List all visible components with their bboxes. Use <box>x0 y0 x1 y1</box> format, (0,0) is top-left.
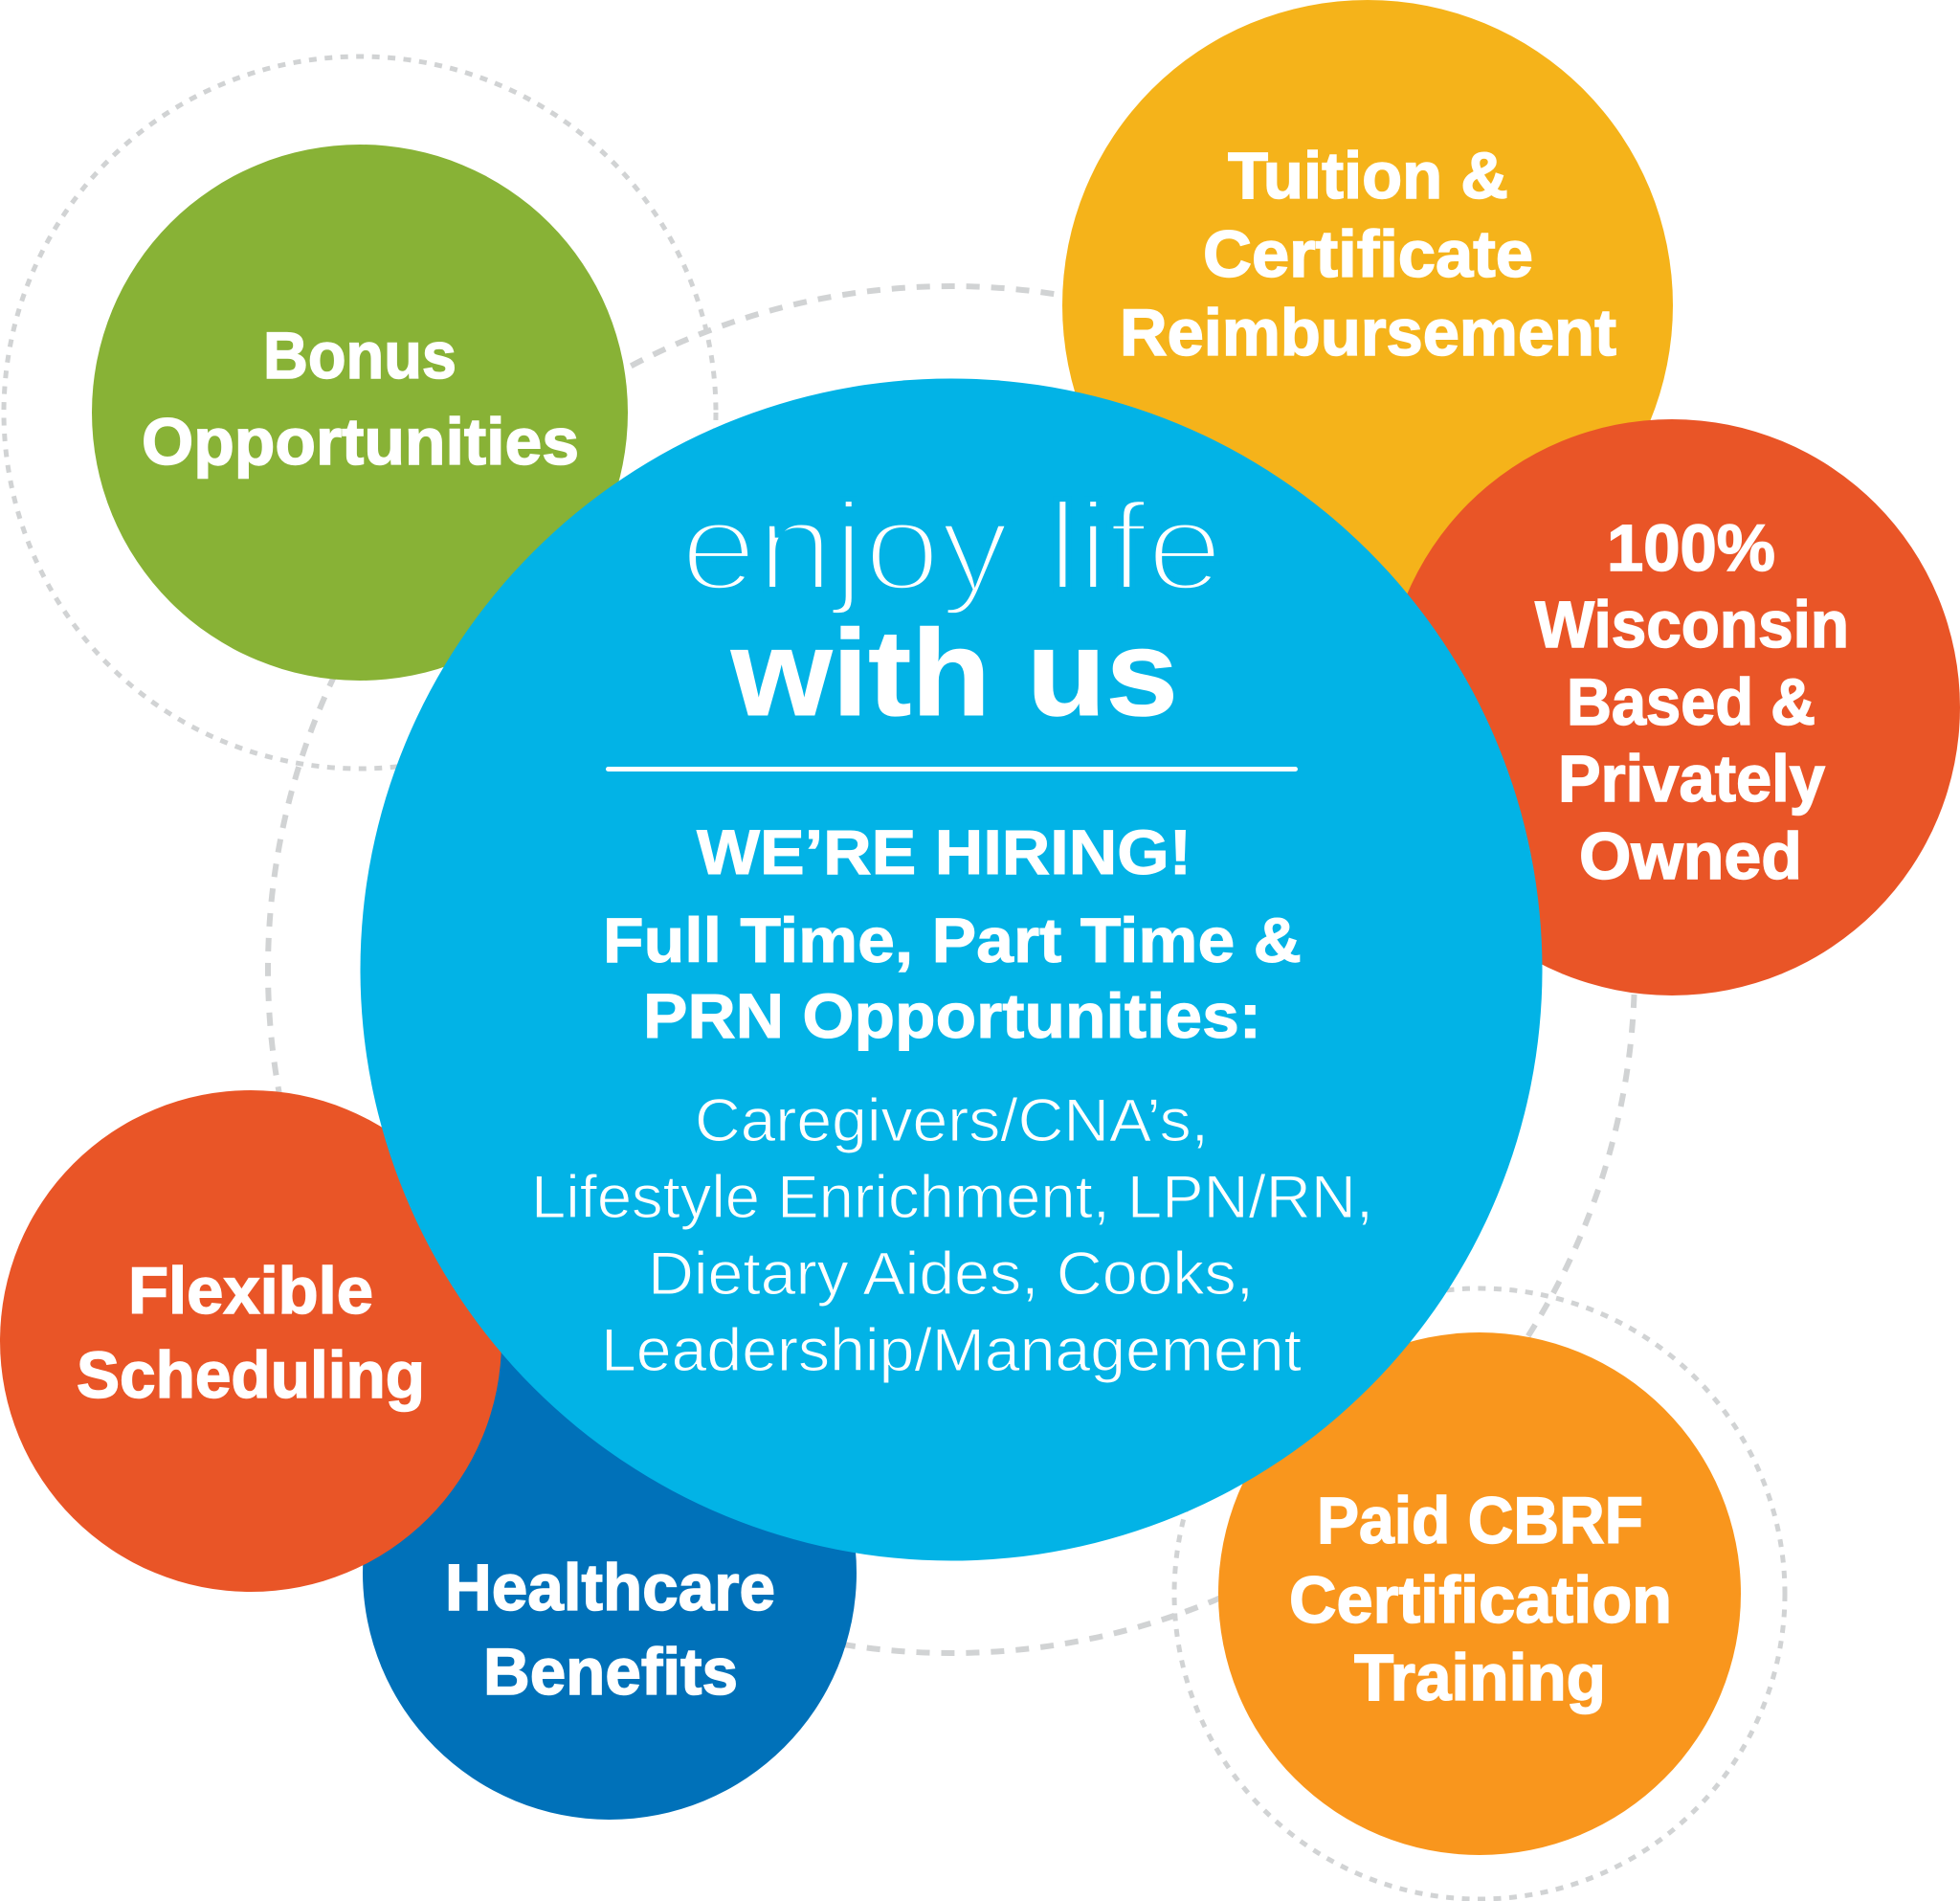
subheading: full time, part time and PRN: Full Time, Part Time & <box>603 905 1302 975</box>
circle: tuition and certificate reimbursement <box>1062 0 1673 611</box>
circle: tuition and certificate reimbursement: Tuition & <box>1228 139 1508 212</box>
circle: paid CBRF certification training: Paid CBRF <box>1317 1484 1643 1557</box>
heading: enjoy life: enjoy life <box>680 476 1223 616</box>
circle: flexible scheduling: Scheduling <box>77 1338 425 1412</box>
circle: 100% Wisconsin based: Owned <box>1579 819 1802 893</box>
subheading: full time, part time and PRN <box>603 905 1302 1051</box>
circle: paid CBRF certification training: Training <box>1354 1641 1606 1714</box>
circle: flexible scheduling: Flexible <box>128 1254 373 1328</box>
circle: tuition and certificate reimbursement: Reimbursement <box>1120 296 1616 369</box>
circle: healthcare benefits: Benefits <box>483 1635 738 1709</box>
text block: job roles <box>531 1087 1373 1384</box>
dashed ring: around green circle <box>4 56 716 769</box>
circle: bonus opportunities <box>92 145 628 681</box>
central circle <box>360 379 1543 1560</box>
circle: tuition and certificate reimbursement: Certificate <box>1203 217 1533 291</box>
circle: 100% Wisconsin based: Wisconsin <box>1535 588 1849 661</box>
circle: 100% Wisconsin based: Based & <box>1567 665 1815 739</box>
circle: paid CBRF certification training <box>1218 1332 1741 1855</box>
circle: 100% Wisconsin based: 100% <box>1607 511 1775 585</box>
subheading: we're hiring: WE’RE HIRING! <box>697 816 1192 887</box>
text block: job roles: Caregivers/CNA’s, <box>695 1087 1209 1154</box>
text block: job roles: Leadership/Management <box>601 1317 1303 1384</box>
circle: flexible scheduling <box>0 1090 501 1592</box>
circle: healthcare benefits: Healthcare <box>445 1551 775 1624</box>
circle: paid CBRF certification training: Certification <box>1289 1563 1672 1637</box>
circle: bonus opportunities: Opportunities <box>142 405 579 479</box>
circle: 100% Wisconsin based: Privately <box>1558 742 1825 816</box>
text block: job roles: Lifestyle Enrichment, LPN/RN, <box>531 1164 1373 1231</box>
circle: 100% Wisconsin based <box>1384 419 1960 995</box>
circle: healthcare benefits <box>363 1326 857 1820</box>
subheading: full time, part time and PRN: PRN Opportunities: <box>643 980 1261 1051</box>
dashed ring: around central circle <box>268 286 1635 1653</box>
divider line <box>606 767 1298 772</box>
heading: with us: with us <box>730 605 1178 742</box>
circle: bonus opportunities: Bonus <box>263 319 457 392</box>
text block: job roles: Dietary Aides, Cooks, <box>648 1241 1254 1308</box>
dashed ring: around orange circle <box>1174 1288 1785 1899</box>
